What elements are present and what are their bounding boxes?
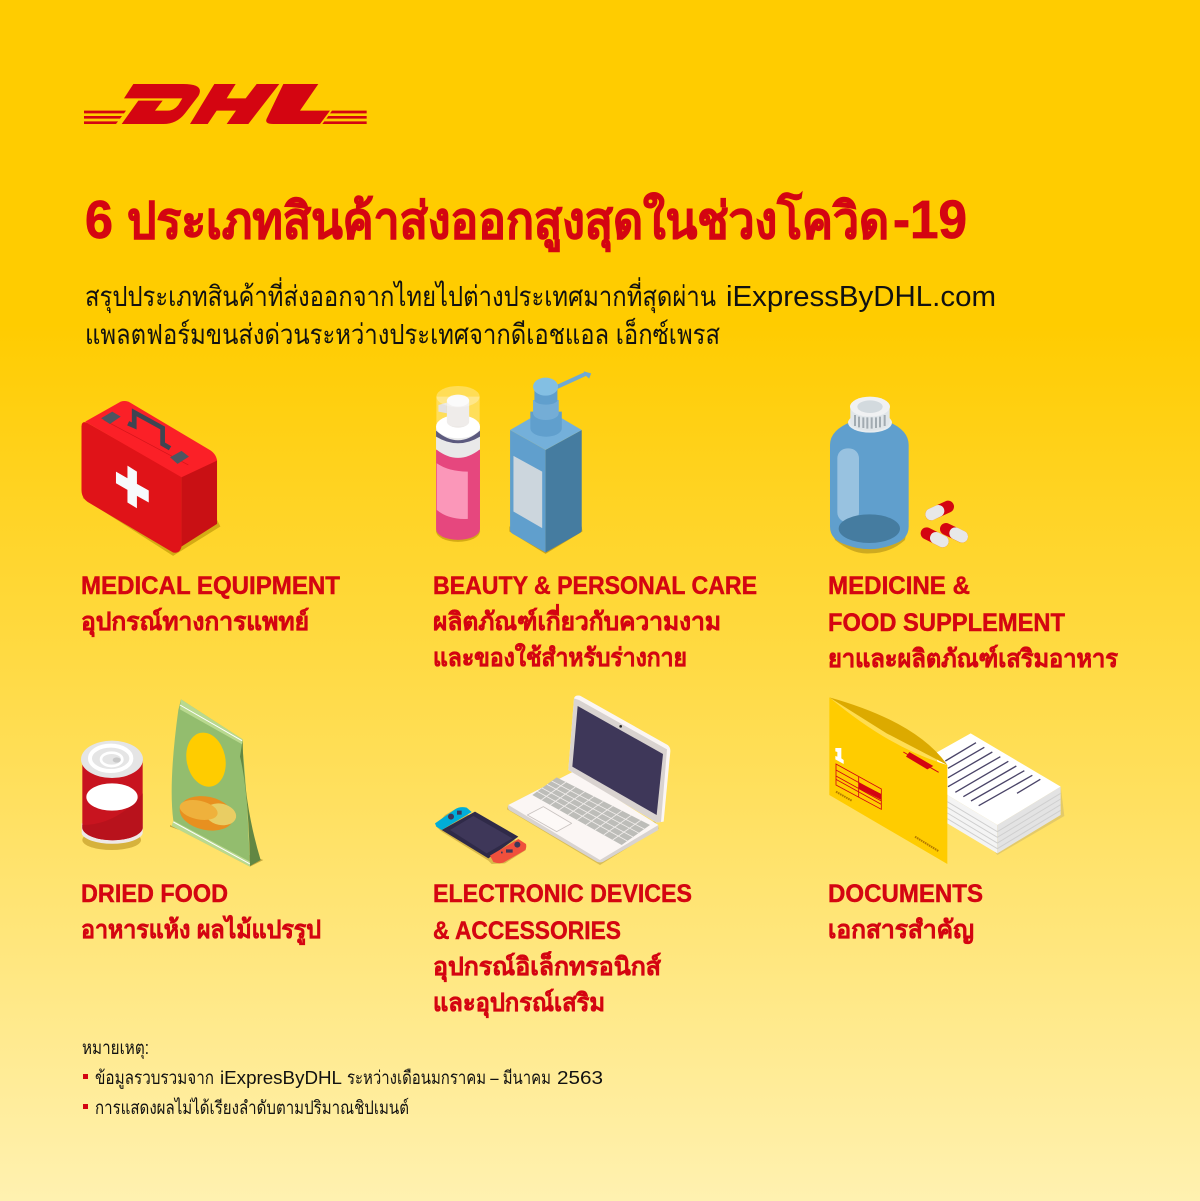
DHL logo	[84, 84, 367, 124]
panel: electronic devices	[433, 695, 692, 1019]
panel: beauty and personal care	[433, 371, 757, 672]
heading: dried food: DRIED FOOD	[81, 880, 228, 908]
footnotes: 2563	[557, 1067, 603, 1088]
icon: envelope and papers	[829, 697, 1064, 864]
footnotes: การแสดงผลไม่ได้เรียงลำดับตามปริมาณชิปเมนต์	[95, 1097, 409, 1118]
icon: can and snack bag	[81, 699, 263, 867]
heading: documents: เอกสารสำคัญ	[828, 916, 974, 944]
footnotes: iExpresByDHL	[220, 1067, 342, 1088]
heading: medicine and food supplement: ยาและผลิตภัณฑ์เสริมอาหาร	[828, 644, 1119, 673]
heading: beauty and personal care: ผลิตภัณฑ์เกี่ยวกับความงาม	[433, 604, 721, 636]
footnotes: ระหว่างเดือนมกราคม – มีนาคม	[347, 1067, 551, 1088]
heading: electronic devices: และอุปกรณ์เสริม	[433, 988, 605, 1019]
panel: medical equipment	[81, 401, 340, 638]
panel: medicine and food supplement	[828, 397, 1119, 673]
heading: medical equipment	[81, 572, 340, 638]
icon: laptop and game console	[435, 695, 670, 865]
footnotes: ข้อมูลรวบรวมจาก	[95, 1067, 214, 1089]
heading: electronic devices: & ACCESSORIES	[433, 917, 621, 945]
heading: beauty and personal care: และของใช้สำหรับร่างกาย	[433, 642, 687, 672]
subtitle: แพลตฟอร์มขนส่งด่วนระหว่างประเทศจากดีเอชแอล เอ็กซ์เพรส	[85, 317, 720, 350]
panel: documents	[828, 697, 1064, 944]
heading: dried food: อาหารแห้ง ผลไม้แปรรูป	[81, 914, 321, 946]
heading: medicine and food supplement: MEDICINE &	[828, 572, 970, 600]
subtitle: iExpressByDHL.com	[726, 281, 996, 313]
heading: beauty and personal care	[433, 572, 757, 672]
heading: medical equipment: อุปกรณ์ทางการแพทย์	[81, 607, 309, 638]
heading: medicine and food supplement: FOOD SUPPLEMENT	[828, 609, 1065, 637]
heading: electronic devices: อุปกรณ์อิเล็กทรอนิกส์	[433, 951, 662, 983]
title: -19	[893, 190, 967, 250]
footnotes: หมายเหตุ:	[82, 1037, 149, 1060]
footnotes	[82, 1037, 603, 1118]
heading: documents	[828, 880, 983, 944]
heading: beauty and personal care: BEAUTY & PERSONAL CARE	[433, 572, 757, 600]
heading: dried food	[81, 880, 321, 946]
heading: electronic devices: ELECTRONIC DEVICES	[433, 880, 692, 908]
icon: pump bottles	[436, 371, 591, 554]
heading: electronic devices	[433, 880, 692, 1019]
title: 6	[85, 190, 113, 250]
icon: medicine bottle and capsules	[830, 397, 962, 553]
title: ประเภทสินค้าส่งออกสูงสุดในช่วงโควิด	[127, 191, 889, 252]
heading: medical equipment: MEDICAL EQUIPMENT	[81, 572, 340, 600]
heading: documents: DOCUMENTS	[828, 880, 983, 908]
heading: medicine and food supplement	[828, 572, 1119, 673]
panel: dried food	[81, 699, 321, 946]
icon: first aid case	[81, 401, 220, 556]
subtitle	[85, 277, 996, 350]
subtitle: สรุปประเภทสินค้าที่ส่งออกจากไทยไปต่างประเทศมากที่สุดผ่าน	[85, 277, 716, 314]
